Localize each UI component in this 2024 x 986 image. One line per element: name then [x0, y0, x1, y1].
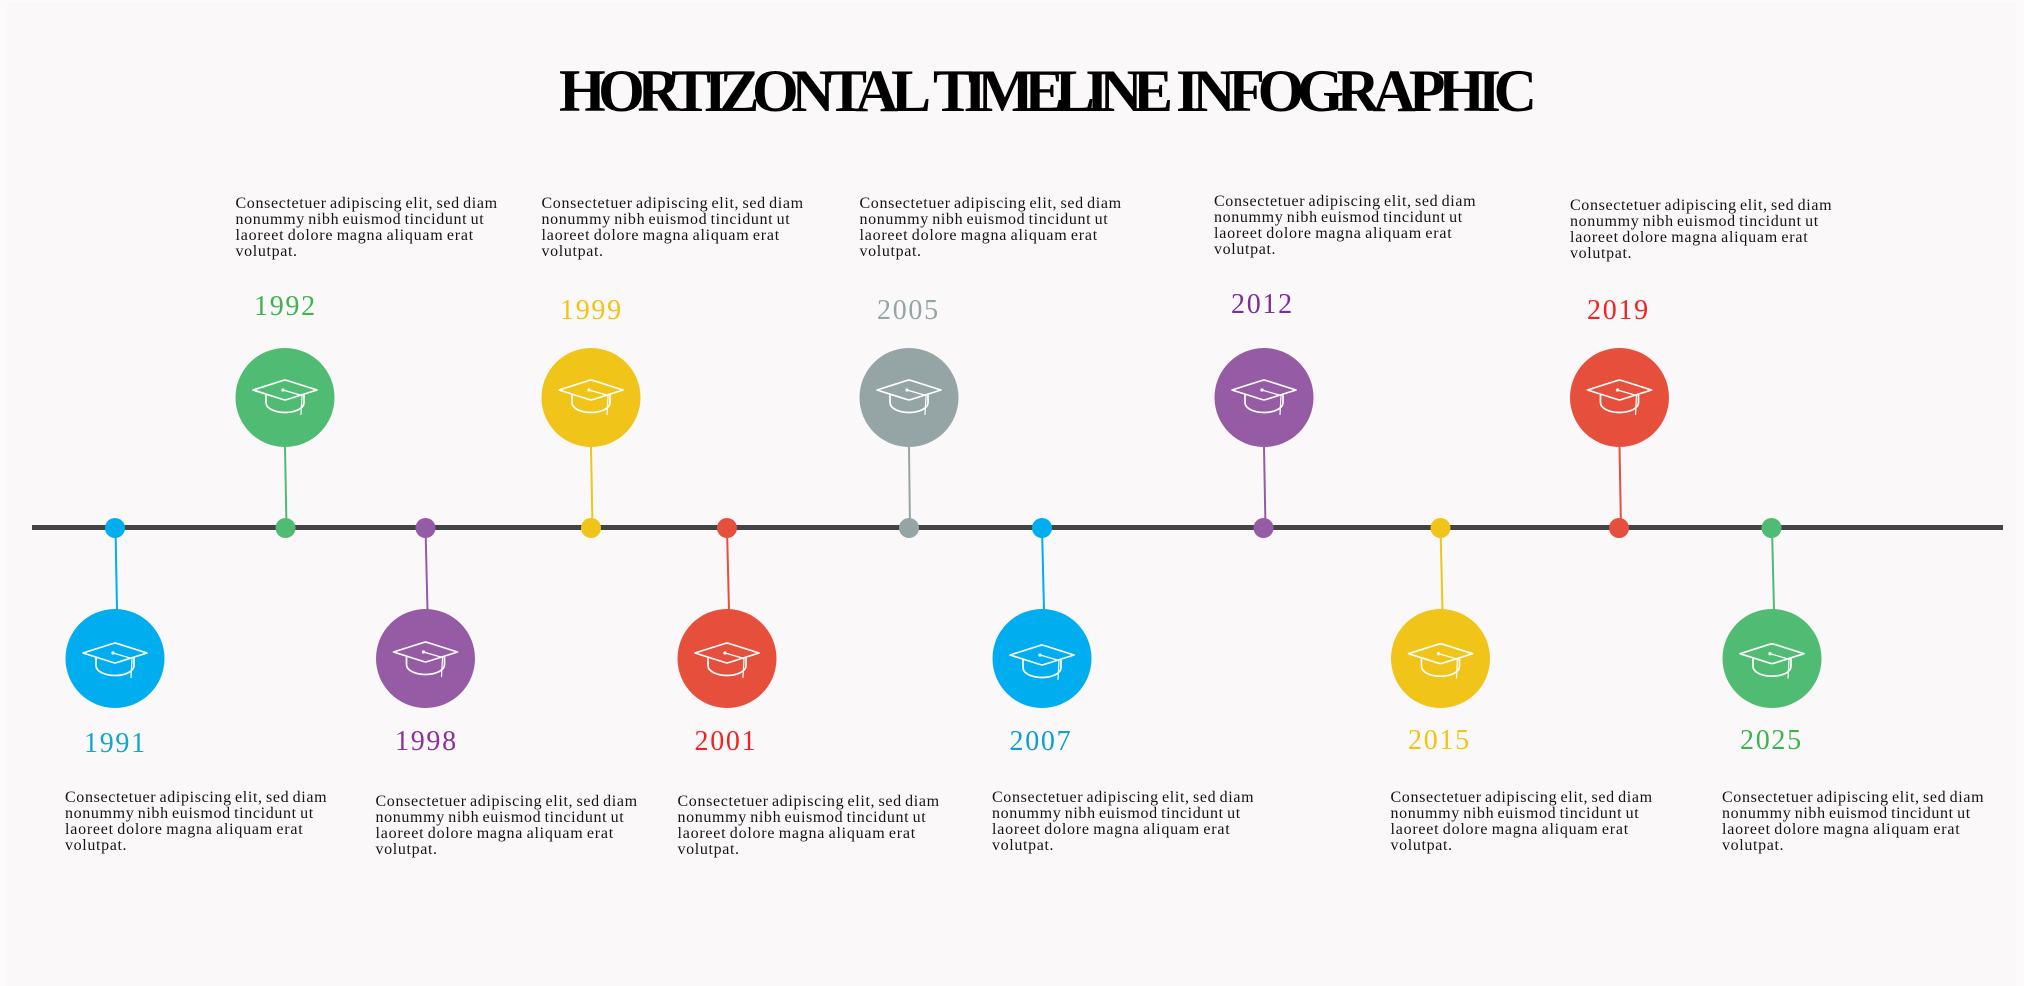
connector 1991 [116, 528, 117, 610]
description 2025: nonummy nibh euismod tincidunt ut [1722, 805, 1971, 822]
circle 2007 [992, 609, 1092, 708]
description 1999: nonummy nibh euismod tincidunt ut [542, 211, 790, 228]
marker dot 1999 [581, 518, 601, 538]
connector 1998 [426, 528, 428, 610]
title: INFOGRAPHIC [1176, 58, 1537, 124]
marker dot 1991 [105, 518, 125, 538]
circle 2025 [1722, 609, 1822, 708]
description 2025: Consectetuer adipiscing elit, sed diam [1722, 789, 1984, 806]
circle 2019 [1570, 348, 1669, 447]
circle 1992 [236, 348, 334, 447]
connector 2019 [1620, 447, 1621, 528]
year 2015: 2015 [1408, 725, 1471, 756]
marker dot 2007 [1032, 518, 1052, 538]
icon: graduation cap 2025 [1740, 644, 1804, 678]
circle 1998 [376, 609, 475, 708]
circle 2005 [860, 348, 958, 447]
icon: graduation cap 1991 [83, 643, 147, 678]
circle 2012 [1214, 348, 1314, 447]
icon: graduation cap 1998 [394, 642, 458, 676]
description 2001: Consectetuer adipiscing elit, sed diam [678, 793, 940, 810]
icon: graduation cap 2012 [1232, 380, 1296, 414]
description 2019: nonummy nibh euismod tincidunt ut [1570, 213, 1819, 230]
description 2015: nonummy nibh euismod tincidunt ut [1390, 805, 1639, 822]
description 2012: Consectetuer adipiscing elit, sed diam [1214, 193, 1476, 210]
description 1991: laoreet dolore magna aliquam erat [65, 821, 303, 838]
connector 2015 [1440, 528, 1442, 610]
description 2007: volutpat. [992, 837, 1054, 854]
event: 1992 [236, 195, 498, 538]
title: TIMELINE [933, 58, 1173, 124]
year 2007: 2007 [1010, 726, 1072, 757]
icon: graduation cap 2001 [695, 643, 759, 678]
marker dot 2015 [1430, 518, 1450, 538]
description 2012: nonummy nibh euismod tincidunt ut [1214, 209, 1463, 226]
circle 1999 [542, 348, 640, 447]
description 1998: volutpat. [376, 841, 438, 858]
description 1998: nonummy nibh euismod tincidunt ut [376, 809, 624, 826]
connector 2012 [1264, 447, 1266, 528]
description 2019: Consectetuer adipiscing elit, sed diam [1570, 197, 1832, 214]
marker dot 1992 [276, 518, 296, 538]
year 1992: 1992 [254, 291, 317, 322]
connector 2025 [1772, 528, 1774, 610]
event: 1999 [542, 195, 804, 538]
connector 2001 [727, 528, 729, 610]
description 2012: laoreet dolore magna aliquam erat [1214, 225, 1452, 242]
year 2019: 2019 [1587, 295, 1650, 326]
circle 2015 [1391, 609, 1490, 708]
marker dot 2012 [1254, 518, 1274, 538]
description 2007: laoreet dolore magna aliquam erat [992, 821, 1230, 838]
icon: graduation cap 1992 [253, 380, 317, 414]
circle 2001 [678, 609, 776, 708]
year 2012: 2012 [1231, 289, 1294, 320]
description 2015: volutpat. [1390, 837, 1453, 854]
event: 2015 [1390, 518, 1653, 854]
title: HORTIZONTAL [559, 58, 931, 124]
event: 2001 [678, 518, 940, 858]
description 2019: volutpat. [1570, 245, 1632, 262]
description 1991: volutpat. [65, 837, 127, 854]
description 2005: Consectetuer adipiscing elit, sed diam [860, 195, 1122, 212]
icon: graduation cap 2005 [877, 380, 941, 414]
event: 2025 [1722, 518, 1984, 854]
year 2005: 2005 [877, 295, 940, 326]
description 1999: Consectetuer adipiscing elit, sed diam [542, 195, 804, 212]
description 2025: laoreet dolore magna aliquam erat [1722, 821, 1960, 838]
event: 2012 [1214, 193, 1476, 538]
marker dot 2005 [899, 518, 919, 538]
connector 1999 [591, 447, 592, 528]
connector 2005 [909, 447, 910, 528]
icon: graduation cap 2019 [1588, 380, 1652, 414]
description 2007: Consectetuer adipiscing elit, sed diam [992, 789, 1254, 806]
description 2025: volutpat. [1722, 837, 1784, 854]
description 1999: laoreet dolore magna aliquam erat [542, 227, 780, 244]
year 2025: 2025 [1740, 725, 1803, 756]
timeline axis [32, 525, 2003, 530]
marker dot 2025 [1762, 518, 1782, 538]
description 2005: volutpat. [860, 243, 922, 260]
description 2001: laoreet dolore magna aliquam erat [678, 825, 916, 842]
year 1999: 1999 [560, 295, 623, 326]
marker dot 1998 [416, 518, 436, 538]
year 1998: 1998 [395, 726, 458, 757]
description 1999: volutpat. [542, 243, 604, 260]
description 2019: laoreet dolore magna aliquam erat [1570, 229, 1808, 246]
icon: graduation cap 2015 [1408, 644, 1472, 678]
description 2001: nonummy nibh euismod tincidunt ut [678, 809, 926, 826]
description 2005: laoreet dolore magna aliquam erat [860, 227, 1098, 244]
icon: graduation cap 2007 [1010, 645, 1074, 680]
description 2012: volutpat. [1214, 241, 1276, 258]
description 1998: laoreet dolore magna aliquam erat [376, 825, 614, 842]
marker dot 2019 [1609, 518, 1629, 538]
description 1992: laoreet dolore magna aliquam erat [236, 227, 474, 244]
description 1992: nonummy nibh euismod tincidunt ut [236, 211, 484, 228]
event: 2007 [992, 518, 1254, 854]
description 2005: nonummy nibh euismod tincidunt ut [860, 211, 1108, 228]
connector 2007 [1042, 528, 1044, 610]
event: 1991 [65, 518, 327, 854]
description 1991: Consectetuer adipiscing elit, sed diam [65, 789, 327, 806]
icon: graduation cap 1999 [559, 380, 623, 414]
event: 2005 [860, 195, 1122, 538]
description 1991: nonummy nibh euismod tincidunt ut [65, 805, 314, 822]
circle 1991 [66, 609, 164, 708]
description 2007: nonummy nibh euismod tincidunt ut [992, 805, 1241, 822]
marker dot 2001 [717, 518, 737, 538]
connector 1992 [285, 447, 286, 528]
event: 1998 [376, 518, 638, 858]
description 1998: Consectetuer adipiscing elit, sed diam [376, 793, 638, 810]
year 1991: 1991 [84, 728, 147, 759]
description 2001: volutpat. [678, 841, 740, 858]
description 2015: Consectetuer adipiscing elit, sed diam [1390, 789, 1653, 806]
description 2015: laoreet dolore magna aliquam erat [1390, 821, 1629, 838]
description 1992: Consectetuer adipiscing elit, sed diam [236, 195, 498, 212]
description 1992: volutpat. [236, 243, 298, 260]
event: 2019 [1570, 197, 1832, 538]
year 2001: 2001 [694, 726, 757, 757]
